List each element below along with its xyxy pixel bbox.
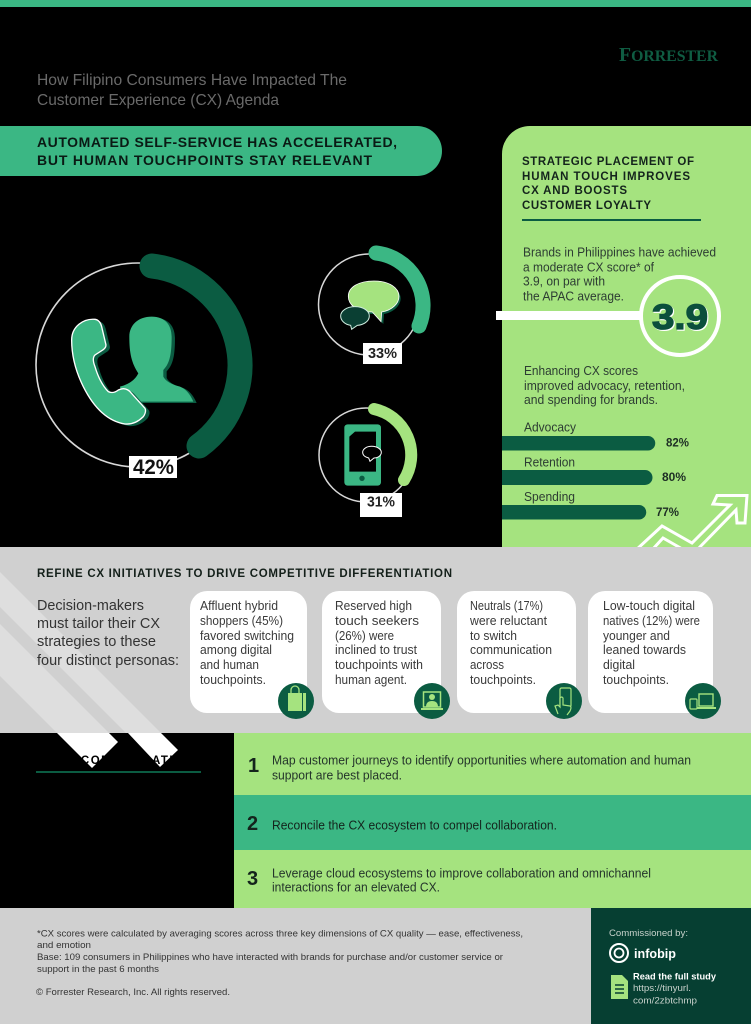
footer: notes and base xyxy=(0,908,591,1024)
persona card: affluent hybrid shoppers xyxy=(190,591,314,719)
banner: automated self-service: BUT HUMAN TOUCHPOINTS STAY RELEVANT xyxy=(37,152,372,168)
recommendations heading with diagonal cut-outs: RECOMMENDATIONS xyxy=(62,755,202,767)
recommendation 3: interactions for an elevated CX. xyxy=(272,880,440,894)
chart: 31% mobile ring xyxy=(319,408,413,517)
label: 31%: 31% xyxy=(367,494,395,510)
intro text: Decision-makers xyxy=(37,597,144,614)
intro text: strategies to these xyxy=(37,633,156,650)
icon: chat bubbles xyxy=(341,281,401,329)
recommendation 1: support are best placed. xyxy=(272,768,402,782)
score callout: 3.9: 3.9 xyxy=(653,299,709,338)
panel heading: CUSTOMER LOYALTY xyxy=(522,200,651,212)
persona card: low-touch digital natives: digital xyxy=(603,658,635,672)
section heading: REFINE CX INITIATIVES TO DRIVE COMPETITIVE DIFFERENTIATION xyxy=(37,568,452,580)
study link: com/2zbtchmp xyxy=(633,996,697,1006)
icon: mobile phone with message xyxy=(344,424,381,486)
persona card: reserved high touch seekers xyxy=(322,591,450,719)
persona card: low-touch digital natives: younger and xyxy=(603,629,670,643)
footer: notes and base: support in the past 6 months xyxy=(37,964,159,975)
title: How Filipino Consumers Have Impacted The xyxy=(37,72,347,89)
persona card: low-touch digital natives: leaned towards xyxy=(603,643,686,657)
persona card: reserved high touch seekers: (26%) were xyxy=(335,629,394,643)
persona card: affluent hybrid shoppers: among digital xyxy=(200,643,272,657)
icon: hand on smartphone xyxy=(546,683,582,719)
chart: 33% chat ring xyxy=(318,253,423,364)
bar chart: advocacy, retention, spending: Spending xyxy=(524,490,575,504)
top accent bar xyxy=(0,0,751,7)
persona card: neutrals: to switch xyxy=(470,629,517,643)
intro text: four distinct personas: xyxy=(37,652,179,669)
panel: refine CX initiatives xyxy=(0,547,751,733)
footer panel: commissioned by: Commissioned by: xyxy=(609,928,688,939)
persona card: low-touch digital natives: natives (12%) were xyxy=(603,614,700,628)
persona card: affluent hybrid shoppers: touchpoints. xyxy=(200,673,266,687)
title xyxy=(37,72,347,109)
intro text: must tailor their CX xyxy=(37,615,160,632)
enhancing CX text: Enhancing CX scores xyxy=(524,363,638,378)
icon: devices xyxy=(685,683,721,719)
panel heading: HUMAN TOUCH IMPROVES xyxy=(522,171,690,183)
persona card: low-touch digital natives xyxy=(588,591,721,719)
bar chart: advocacy, retention, spending: 82% xyxy=(666,438,689,450)
recommendation 3: Leverage cloud ecosystems to improve collaboration and omnichannel xyxy=(272,866,651,880)
persona card: neutrals: Neutrals (17%) xyxy=(470,599,543,613)
persona card: low-touch digital natives: Low-touch digital xyxy=(603,599,695,613)
study link: https://tinyurl. xyxy=(633,983,691,994)
footer panel: commissioned by xyxy=(591,908,751,1024)
study link: Read the full study xyxy=(633,972,717,982)
persona card: neutrals: were reluctant xyxy=(469,614,548,628)
intro text xyxy=(37,597,179,669)
panel heading: STRATEGIC PLACEMENT OF xyxy=(522,156,694,168)
recommendation 2 xyxy=(234,795,751,850)
persona card: reserved high touch seekers: Reserved high xyxy=(335,599,412,613)
persona card: affluent hybrid shoppers: and human xyxy=(200,658,259,672)
panel: strategic placement of human touch xyxy=(496,126,751,552)
icon: shopping bag xyxy=(278,683,314,719)
CX score text: a moderate CX score* of xyxy=(523,260,654,274)
banner: automated self-service: AUTOMATED SELF-SERVICE HAS ACCELERATED, xyxy=(37,134,397,150)
title: Customer Experience (CX) Agenda xyxy=(37,92,279,109)
persona card: neutrals: touchpoints. xyxy=(470,673,536,687)
persona card: low-touch digital natives: touchpoints. xyxy=(603,673,669,687)
panel heading: CX AND BOOSTS xyxy=(522,185,627,197)
icon: video agent xyxy=(414,683,450,719)
banner: automated self-service xyxy=(0,126,442,176)
score callout: 3.9 xyxy=(496,277,719,355)
chart: 42% phone and human ring xyxy=(36,263,240,479)
recommendation 3 xyxy=(234,850,751,908)
recommendations heading with diagonal cut-outs xyxy=(36,733,202,773)
footer: notes and base: *CX scores were calculated by averaging scores across three key dimensions of CX quality — ease, effectiveness, xyxy=(37,928,523,940)
label: 42%: 42% xyxy=(133,456,174,479)
bar chart: advocacy, retention, spending: Advocacy xyxy=(524,420,577,434)
persona card: reserved high touch seekers: touch seekers xyxy=(335,614,419,628)
recommendation 1: 1 xyxy=(248,755,259,777)
recommendation 2: 2 xyxy=(247,813,258,835)
enhancing CX text xyxy=(524,363,685,407)
panel heading xyxy=(522,156,694,212)
persona card: affluent hybrid shoppers: favored switching xyxy=(200,629,294,643)
recommendation 1: Map customer journeys to identify opportunities where automation and human xyxy=(272,754,691,768)
enhancing CX text: and spending for brands. xyxy=(524,392,658,407)
CX score text: Brands in Philippines have achieved xyxy=(523,244,716,260)
CX score text: the APAC average. xyxy=(523,288,624,304)
footer: notes and base: and emotion xyxy=(37,940,91,951)
icon: document xyxy=(611,975,628,999)
CX score text xyxy=(523,244,716,304)
recommendation 2: Reconcile the CX ecosystem to compel collaboration. xyxy=(272,818,557,832)
persona card: neutrals: across xyxy=(470,658,504,672)
persona card: reserved high touch seekers: inclined to trust xyxy=(335,643,418,657)
CX score text: 3.9, on par with xyxy=(523,274,605,288)
bar chart: advocacy, retention, spending: 77% xyxy=(656,507,679,519)
persona card: affluent hybrid shoppers: shoppers (45%) xyxy=(200,614,283,628)
persona card: neutrals xyxy=(457,591,582,719)
logo: infobip xyxy=(610,944,676,962)
persona card: reserved high touch seekers: human agent. xyxy=(335,673,407,687)
recommendation 1 xyxy=(234,733,751,795)
label: 33%: 33% xyxy=(368,345,397,362)
Forrester logo: FORRESTER xyxy=(619,44,718,66)
icon: person and telephone xyxy=(72,317,197,426)
bar chart: advocacy, retention, spending: Retention xyxy=(524,456,575,470)
bar chart: advocacy, retention, spending: 80% xyxy=(662,472,686,484)
footer: notes and base: Base: 109 consumers in Philippines who have interacted with brands for purchase and/or customer service or xyxy=(37,952,503,963)
persona card: neutrals: communication xyxy=(470,643,552,657)
recommendation 3: 3 xyxy=(247,868,258,890)
enhancing CX text: improved advocacy, retention, xyxy=(524,378,685,393)
study link xyxy=(633,972,717,1006)
icon: rising arrow xyxy=(636,496,747,552)
footer: notes and base: © Forrester Research, Inc. All rights reserved. xyxy=(36,987,230,998)
persona card: reserved high touch seekers: touchpoints with xyxy=(335,658,423,672)
logo: infobip: infobip xyxy=(634,946,676,961)
score callout: 3.9: 3.9 xyxy=(652,298,708,337)
bar chart: advocacy, retention, spending xyxy=(502,420,689,520)
persona card: affluent hybrid shoppers: Affluent hybrid xyxy=(200,599,278,613)
